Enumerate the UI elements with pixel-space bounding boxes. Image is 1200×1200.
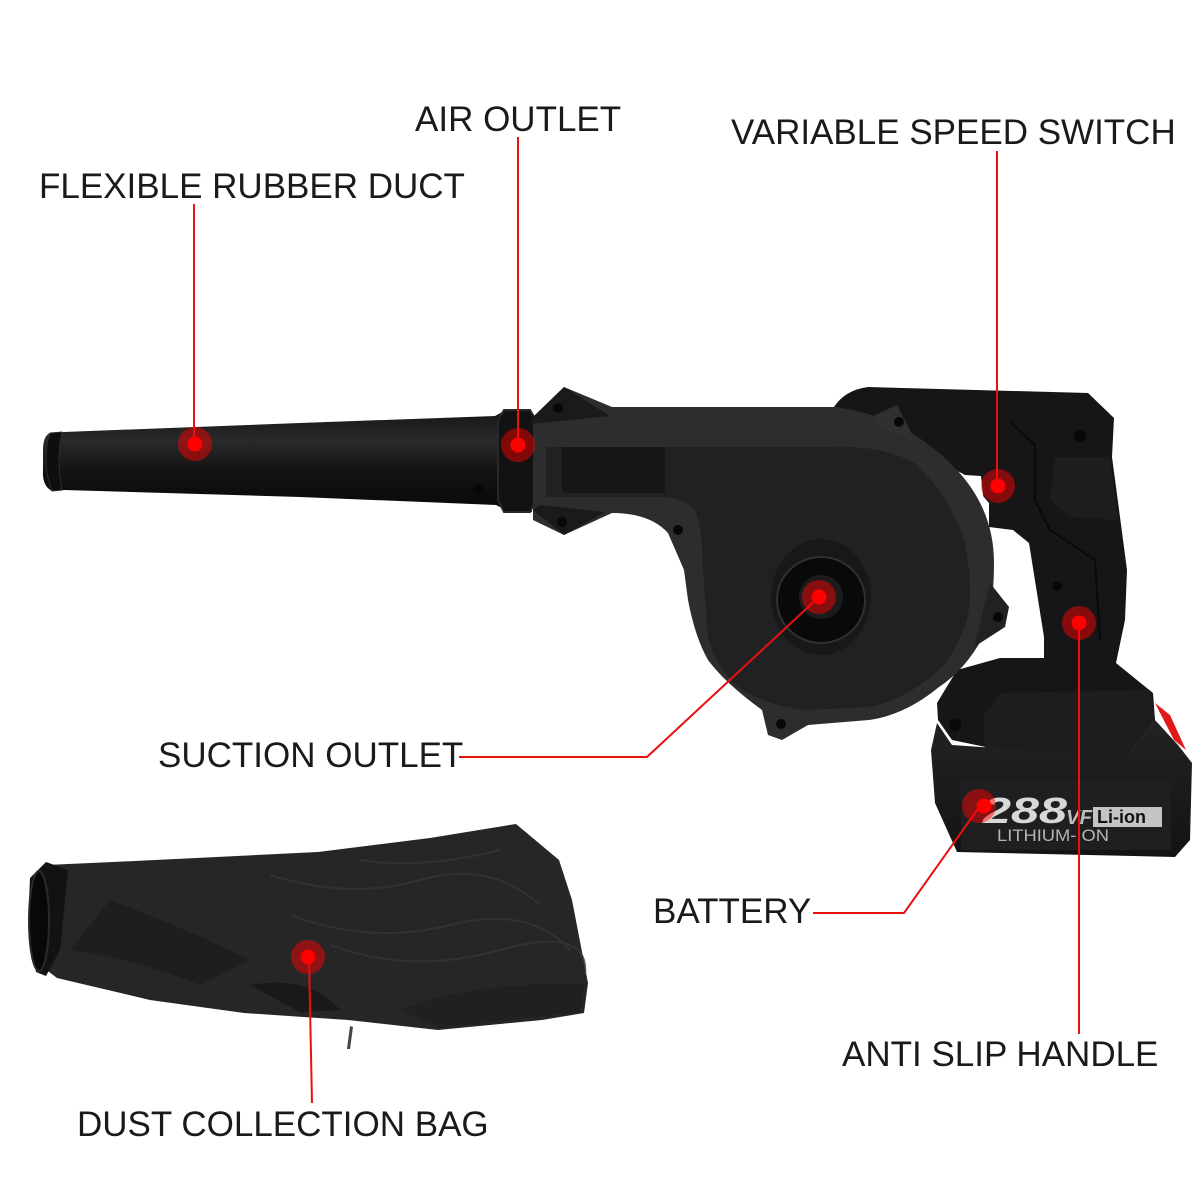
bag folds: [270, 850, 585, 975]
label: variable speed switch: [731, 113, 1176, 503]
flexible rubber duct tube: [43, 410, 532, 512]
duct hole: [473, 484, 483, 494]
bag opening: [29, 871, 49, 971]
battery pack: [931, 720, 1192, 857]
label: anti slip handle: ANTI SLIP HANDLE: [842, 1035, 1158, 1074]
trigger gap white: [965, 475, 984, 503]
label: battery: [653, 789, 996, 931]
blower product: [43, 387, 1192, 857]
label: dust collection bag: DUST COLLECTION BAG: [77, 1105, 489, 1144]
label: suction outlet: SUCTION OUTLET: [158, 736, 463, 775]
battery red stripe: [1155, 703, 1186, 750]
handle and upper housing: [834, 387, 1155, 757]
label: variable speed switch: VARIABLE SPEED SWITCH: [731, 113, 1176, 152]
grip panel: [1050, 457, 1118, 520]
label: air outlet: AIR OUTLET: [415, 100, 621, 139]
handle screws: [949, 430, 1128, 731]
battery mount raised plate: [983, 690, 1155, 757]
label: dust collection bag: [77, 940, 489, 1144]
label: flexible rubber duct: [39, 167, 465, 461]
blower housing outer rim: [533, 387, 994, 740]
battery label: LITHIUM-ION: [997, 826, 1109, 845]
label: air outlet: [415, 100, 621, 462]
housing screw ears: [530, 387, 1003, 729]
housing ear right: [974, 583, 1009, 647]
label: suction outlet: [158, 580, 836, 775]
window slot: [562, 447, 665, 493]
duct nozzle rim: [46, 432, 62, 491]
battery label panel: [961, 780, 1171, 850]
battery label: [982, 790, 1162, 845]
air outlet ring: [498, 410, 536, 512]
battery label: VF: [1066, 807, 1093, 829]
housing inner face: [546, 447, 970, 710]
bag shadow folds: [70, 900, 250, 985]
label: anti slip handle: [842, 606, 1158, 1074]
bag collar ring: [28, 862, 68, 976]
battery label: 288: [982, 790, 1067, 831]
suction opening: [771, 539, 871, 655]
zipper tag: [347, 1026, 353, 1049]
label: flexible rubber duct: FLEXIBLE RUBBER DUCT: [39, 167, 465, 206]
dust collection bag product: [28, 824, 588, 1049]
battery label: Li-ion: [1097, 807, 1146, 827]
bag mesh body: [44, 824, 588, 1030]
label: battery: BATTERY: [653, 892, 811, 931]
handle trim: [1010, 422, 1100, 640]
